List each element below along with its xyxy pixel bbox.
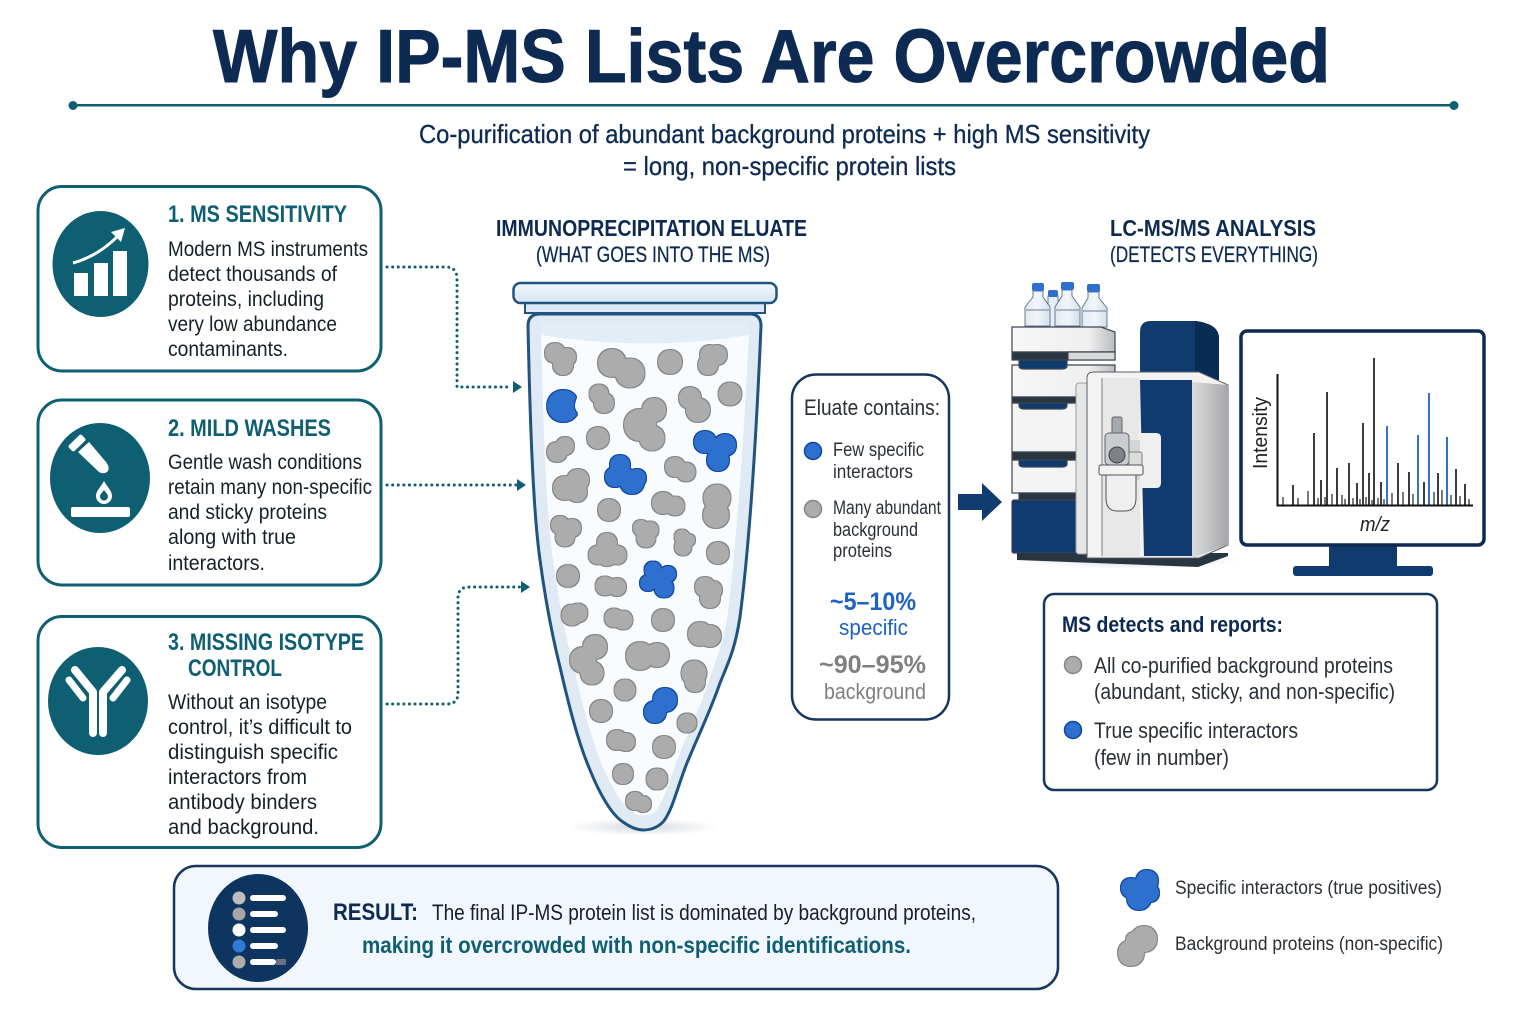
- tube illustration: [514, 283, 776, 830]
- text: missing isotype body: Without an isotype: [168, 690, 327, 714]
- subtitle: = long, non-specific protein lists: [623, 151, 956, 181]
- subtitle: Co-purification of abundant background proteins + high MS sensitivity: [419, 119, 1150, 149]
- ion source: [1099, 417, 1161, 511]
- icon: tube and droplet: [50, 423, 150, 533]
- icon: protein list: [208, 874, 308, 982]
- heading: missing isotype control: [168, 629, 364, 682]
- text: mild washes body: retain many non-specific: [168, 475, 372, 499]
- title: Why IP-MS Lists Are Overcrowded: [213, 14, 1330, 98]
- text: result statement: making it overcrowded with non-specific identifications.: [362, 932, 911, 958]
- heading: mild washes: 2. MILD WASHES: [168, 415, 331, 442]
- heading: missing isotype control: 3. MISSING ISOTYPE: [168, 629, 364, 656]
- text: MS sensitivity body: very low abundance: [168, 312, 337, 336]
- legend: background proteins: [1118, 926, 1443, 966]
- legend item: few specific interactors: [804, 440, 924, 483]
- stat: background percent: background: [824, 679, 926, 704]
- item: true specific interactors: [1064, 718, 1298, 770]
- legend: specific interactors: Specific interactors (true positives): [1175, 878, 1442, 899]
- instrument base: [1017, 553, 1228, 567]
- text: mild washes body: and sticky proteins: [168, 500, 327, 524]
- chart: mass spectrum: [1278, 358, 1473, 506]
- legend item: many abundant background: background: [833, 520, 918, 541]
- text: MS sensitivity body: proteins, including: [168, 287, 324, 311]
- heading: immunoprecipitation eluate: IMMUNOPRECIPITATION ELUATE: [496, 215, 807, 241]
- heading: LC-MS/MS analysis: (DETECTS EVERYTHING): [1110, 242, 1318, 267]
- tube shadow: [567, 818, 719, 836]
- heading: MS sensitivity: 1. MS SENSITIVITY: [168, 201, 347, 228]
- panel: eluate contains: [792, 374, 949, 720]
- axis label: intensity: Intensity: [1250, 397, 1272, 469]
- legend: specific interactors: [1121, 870, 1442, 910]
- mass spectrometer body: [1076, 372, 1228, 558]
- legend item: many abundant background: Many abundant: [833, 498, 942, 519]
- arrow: eluate to MS: [958, 483, 1002, 521]
- text: MS sensitivity body: [168, 237, 368, 361]
- axis label: m/z: m/z: [1360, 514, 1390, 536]
- specific interactor proteins: [547, 390, 736, 723]
- heading: LC-MS/MS analysis: LC-MS/MS ANALYSIS: [1110, 215, 1316, 241]
- stat: specific percent: ~5–10%: [830, 588, 916, 616]
- text: missing isotype body: control, it’s difficult to: [168, 715, 352, 739]
- icon: rising bar chart: [52, 211, 148, 317]
- LC-MS instrument: [1012, 282, 1242, 569]
- heading: immunoprecipitation eluate: [496, 215, 807, 267]
- solvent bottles: [1025, 282, 1107, 327]
- tube lid: [514, 283, 776, 313]
- subtitle: [419, 119, 1150, 181]
- panel: 3. Missing isotype control: [38, 616, 381, 848]
- item: background proteins: All co-purified background proteins: [1094, 653, 1393, 678]
- stat: specific percent: specific: [839, 615, 908, 640]
- heading: immunoprecipitation eluate: (WHAT GOES INTO THE MS): [536, 242, 770, 267]
- arrow: washes to tube: [387, 479, 526, 491]
- panel: 2. Mild washes: [38, 400, 381, 585]
- stat: specific percent: [830, 588, 916, 640]
- text: missing isotype body: antibody binders: [168, 790, 317, 814]
- legend item: few specific interactors: Few specific: [833, 440, 924, 461]
- legend: background proteins: Background proteins (non-specific): [1175, 934, 1443, 955]
- heading: LC-MS/MS analysis: [1110, 215, 1318, 267]
- text: missing isotype body: interactors from: [168, 765, 307, 789]
- stat: background percent: [819, 651, 926, 704]
- item: true specific interactors: True specific interactors: [1094, 718, 1298, 743]
- tall navy housing: [1140, 321, 1219, 380]
- background proteins: [545, 343, 742, 812]
- text: result statement: [333, 899, 976, 958]
- monitor stand: [1293, 545, 1433, 576]
- LC module stack: [1012, 327, 1115, 553]
- text: eluate contains heading: Eluate contains:: [804, 395, 940, 420]
- spectrum monitor: [1241, 331, 1484, 576]
- item: background proteins: [1064, 653, 1395, 704]
- panel: 1. MS sensitivity: [38, 186, 381, 371]
- heading: missing isotype control: CONTROL: [188, 655, 282, 682]
- text: mild washes body: Gentle wash conditions: [168, 450, 362, 474]
- text: missing isotype body: distinguish specific: [168, 740, 338, 764]
- text: MS sensitivity body: contaminants.: [168, 337, 288, 361]
- icon: antibody: [48, 647, 148, 755]
- text: mild washes body: interactors.: [168, 551, 265, 575]
- panel: result: [174, 866, 1058, 989]
- arrow: sensitivity to tube: [387, 267, 522, 393]
- legend item: many abundant background: proteins: [833, 541, 892, 562]
- title underline: [68, 101, 1458, 110]
- text: result statement: The final IP-MS protein list is dominated by background proteins,: [432, 900, 976, 925]
- text: MS sensitivity body: Modern MS instruments: [168, 237, 368, 261]
- legend item: few specific interactors: interactors: [833, 462, 913, 483]
- arrow: isotype to tube: [387, 581, 530, 704]
- item: background proteins: (abundant, sticky, and non-specific): [1094, 679, 1395, 704]
- text: MS detects heading: MS detects and reports:: [1062, 612, 1283, 637]
- text: result statement: RESULT:: [333, 899, 418, 926]
- text: missing isotype body: [168, 690, 352, 839]
- text: mild washes body: along with true: [168, 525, 296, 549]
- stat: background percent: ~90–95%: [819, 651, 926, 679]
- panel: MS detects and reports: [1044, 594, 1437, 790]
- text: missing isotype body: and background.: [168, 815, 319, 839]
- text: mild washes body: [168, 450, 372, 575]
- legend item: many abundant background: [804, 498, 942, 562]
- text: MS sensitivity body: detect thousands of: [168, 262, 337, 286]
- item: true specific interactors: (few in number): [1094, 745, 1229, 770]
